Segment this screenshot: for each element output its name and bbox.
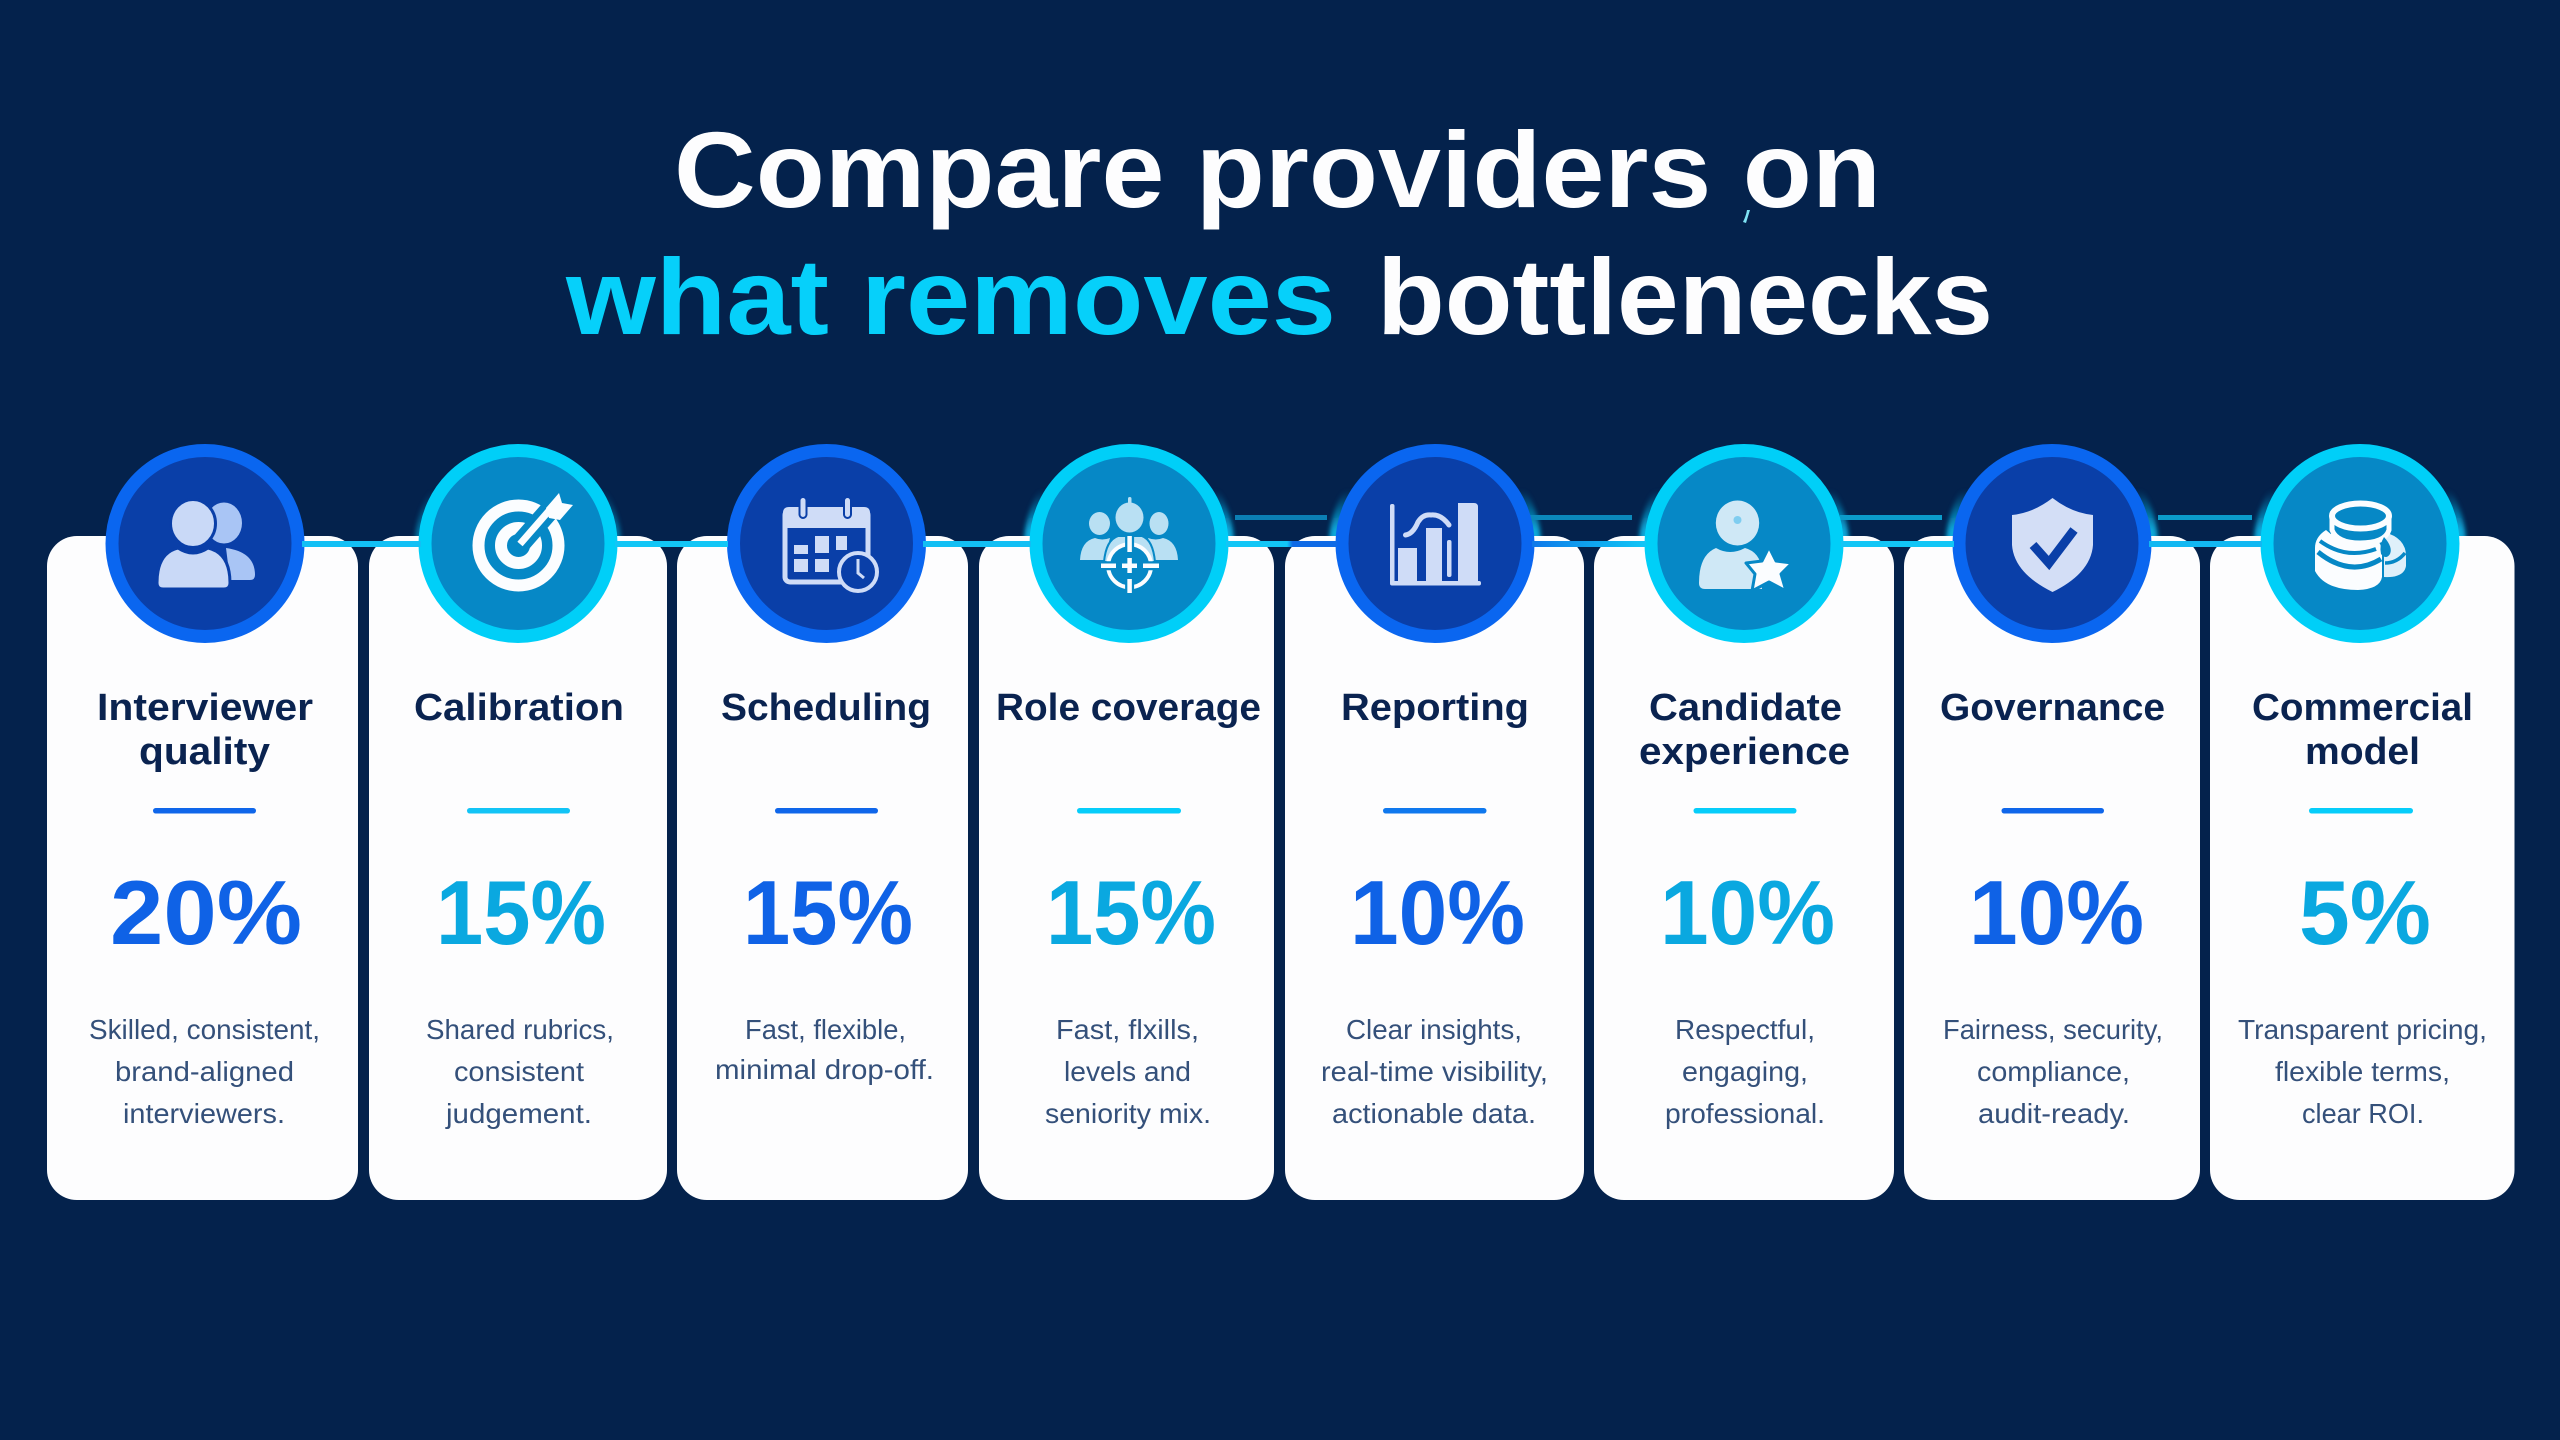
description: calibration: consistent xyxy=(454,1056,584,1087)
icon: bar chart xyxy=(1342,450,1528,636)
icon: team target xyxy=(1036,450,1222,636)
heading: candidate experience: Candidate xyxy=(1649,687,1842,729)
heading: candidate experience: experience xyxy=(1639,731,1850,773)
description: commercial model: clear ROI. xyxy=(2302,1098,2424,1129)
value: 15%: 15% xyxy=(436,863,606,964)
value: 15%: 15% xyxy=(1046,863,1216,964)
description: interviewer quality: interviewers. xyxy=(123,1098,285,1129)
icon: coin stack xyxy=(2267,450,2453,636)
panel: commercial model xyxy=(2210,450,2514,1200)
value: 5%: 5% xyxy=(2299,863,2431,964)
heading: interviewer quality: Interviewer xyxy=(97,687,313,729)
value: 10%: 10% xyxy=(1350,863,1525,964)
connector line xyxy=(302,541,2262,547)
title: bottlenecks xyxy=(1377,236,1993,357)
description: role coverage: Fast, flxills, xyxy=(1056,1014,1199,1045)
panel: reporting xyxy=(1285,450,1584,1200)
description: calibration xyxy=(426,1014,614,1129)
heading: commercial model: Commercial xyxy=(2252,687,2473,729)
icon: target xyxy=(425,450,611,636)
panel: candidate experience xyxy=(1594,450,1894,1200)
description: reporting: actionable data. xyxy=(1332,1098,1536,1129)
description: interviewer quality: Skilled, consistent, xyxy=(89,1014,320,1045)
heading: governance: Governance xyxy=(1940,687,2165,729)
description: calibration: judgement. xyxy=(445,1098,592,1129)
heading: role coverage: Role coverage xyxy=(996,687,1261,729)
description: candidate experience: professional. xyxy=(1665,1098,1825,1129)
description: role coverage xyxy=(1045,1014,1211,1129)
description: reporting xyxy=(1321,1014,1548,1129)
description: candidate experience: engaging, xyxy=(1682,1056,1808,1087)
description: role coverage: seniority mix. xyxy=(1045,1098,1211,1129)
heading: calibration: Calibration xyxy=(414,687,624,729)
description: reporting: real-time visibility, xyxy=(1321,1056,1548,1087)
description: governance: audit-ready. xyxy=(1978,1098,2130,1129)
description: scheduling xyxy=(715,1014,934,1085)
heading: scheduling: Scheduling xyxy=(721,687,931,729)
value: 10%: 10% xyxy=(1969,863,2144,964)
icon: candidate star xyxy=(1651,450,1837,636)
panel: calibration xyxy=(369,450,667,1200)
title xyxy=(565,109,1993,357)
icon: shield check xyxy=(1959,450,2145,636)
value: 20%: 20% xyxy=(110,863,302,964)
icon: calendar xyxy=(734,450,920,636)
icon: people xyxy=(112,450,298,636)
value: 15%: 15% xyxy=(743,863,913,964)
description: commercial model: flexible terms, xyxy=(2275,1056,2450,1087)
description: governance xyxy=(1943,1014,2163,1129)
description: role coverage: levels and xyxy=(1064,1056,1191,1087)
heading: commercial model xyxy=(2252,687,2473,773)
description: scheduling: Fast, flexible, xyxy=(745,1014,906,1045)
description: interviewer quality: brand-aligned xyxy=(115,1056,294,1087)
panel: role coverage xyxy=(979,450,1274,1200)
description: commercial model: Transparent pricing, xyxy=(2238,1014,2487,1045)
description: scheduling: minimal drop-off. xyxy=(715,1054,934,1085)
description: governance: Fairness, security, xyxy=(1943,1014,2163,1045)
panel: interviewer quality xyxy=(47,450,358,1200)
description: commercial model xyxy=(2238,1014,2487,1129)
heading: interviewer quality: quality xyxy=(139,731,270,773)
heading: interviewer quality xyxy=(97,687,313,773)
description: calibration: Shared rubrics, xyxy=(426,1014,614,1045)
panel: governance xyxy=(1904,450,2200,1200)
title: what removes xyxy=(565,236,1336,357)
panel: scheduling xyxy=(677,450,968,1200)
upper glow connector xyxy=(415,439,2466,651)
description: candidate experience: Respectful, xyxy=(1675,1014,1815,1045)
heading: candidate experience xyxy=(1639,687,1850,773)
value: 10%: 10% xyxy=(1660,863,1835,964)
title: Compare providers on xyxy=(674,109,1881,230)
heading: commercial model: model xyxy=(2305,731,2420,773)
description: candidate experience xyxy=(1665,1014,1825,1129)
description: reporting: Clear insights, xyxy=(1346,1014,1522,1045)
description: interviewer quality xyxy=(89,1014,320,1129)
description: governance: compliance, xyxy=(1977,1056,2130,1087)
heading: reporting: Reporting xyxy=(1341,687,1529,729)
